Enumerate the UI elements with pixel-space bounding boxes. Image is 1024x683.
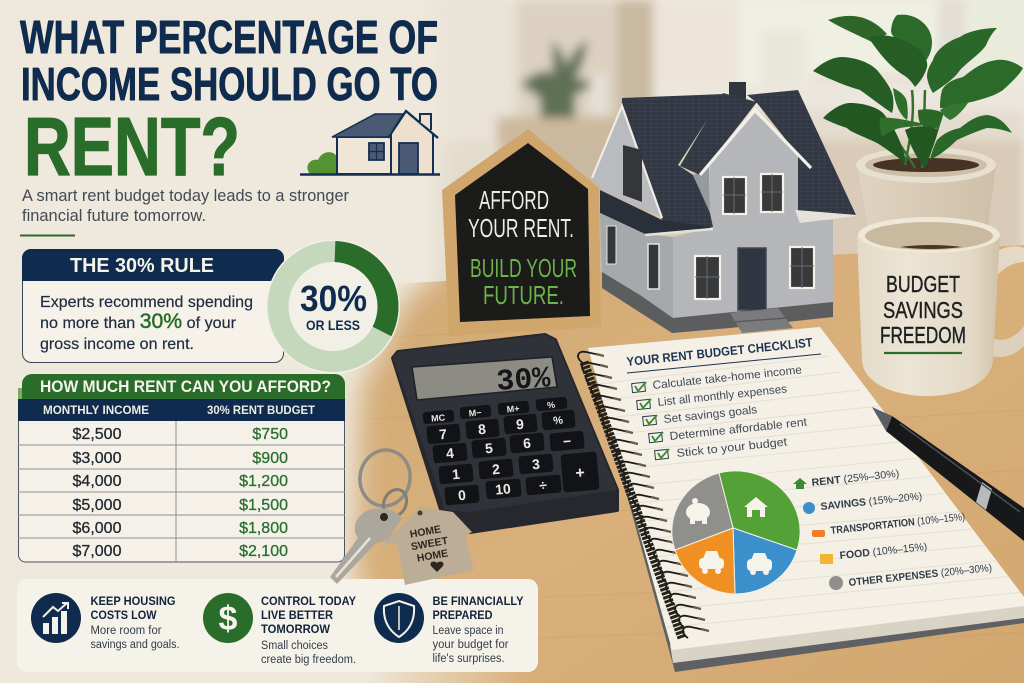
tag heart [431, 562, 443, 572]
pie legend [793, 468, 993, 590]
pie legend: TRANSPORTATION (10%–15%) [830, 511, 966, 537]
income values: $3,000 [73, 450, 122, 467]
tip 3 text: Leave space in [432, 625, 504, 637]
income values: $4,000 [73, 473, 122, 490]
subtitle: A smart rent budget today leads to a stronger [22, 187, 349, 205]
keypad: 4 [445, 445, 455, 461]
tip 2 text: Small choices [261, 640, 328, 652]
rent budget values [239, 426, 288, 560]
pie legend: RENT (25%–30%) [811, 468, 900, 489]
tip 3 text: BE FINANCIALLY [432, 594, 524, 608]
black board [455, 143, 590, 322]
tip 2 text: CONTROL TODAY [261, 594, 356, 608]
rule body text: Experts recommend spending [40, 294, 253, 311]
table column headers [18, 399, 345, 421]
donut chart: 30% or less: 30% [300, 278, 367, 319]
chalkboard sign: FUTURE. [483, 280, 564, 310]
donut chart: 30% or less [266, 240, 400, 374]
tip 2 text: create big freedom. [261, 654, 356, 666]
title: RENT? [24, 100, 240, 193]
white fascia [700, 110, 811, 175]
house keychain: SWEET [410, 535, 449, 553]
tip 1 text: More room for [90, 625, 162, 637]
keypad: M− [468, 407, 482, 419]
keypad: 8 [477, 421, 487, 437]
panel: the 30% rule: THE 30% RULE [70, 255, 214, 277]
income values [73, 426, 122, 560]
icon: shield [374, 593, 424, 643]
notebook back cover [588, 352, 1024, 672]
keypad: 10 [495, 480, 512, 498]
wood frame [442, 129, 601, 336]
keypad: 7 [438, 426, 448, 442]
pie chart [672, 471, 800, 594]
check boxes [632, 382, 669, 460]
checklist items: Set savings goals [663, 404, 758, 426]
spiral binding [578, 352, 709, 638]
green tab [18, 388, 26, 399]
rent budget values: $900 [252, 450, 288, 467]
plant leaves [813, 15, 1023, 168]
eave right [795, 210, 856, 223]
steps [730, 308, 793, 333]
cream fade over left of desk [0, 0, 440, 683]
calculator body [393, 335, 617, 532]
tip 1 text: KEEP HOUSING [90, 594, 176, 608]
rent budget values: $1,200 [239, 473, 288, 490]
rent budget values: $1,500 [239, 497, 288, 514]
gable wall [592, 107, 662, 217]
upper windows [723, 177, 746, 214]
icon: dollar sign: $ [219, 600, 238, 638]
table: how much rent can you afford: HOW MUCH RENT CAN YOU AFFORD? [40, 377, 331, 396]
table heading [22, 374, 345, 399]
chalkboard sign: AFFORD [479, 185, 549, 215]
checklist items: Calculate take-home income [652, 364, 802, 392]
cream fade along the bottom [330, 655, 535, 683]
side windows [607, 226, 616, 264]
lower windows [695, 256, 720, 299]
keypad: 0 [457, 487, 467, 503]
keypad: 2 [491, 461, 501, 477]
pie legend: OTHER EXPENSES (20%–30%) [848, 562, 993, 589]
screen [412, 357, 557, 400]
table: how much rent can you afford: 30% RENT BUDGET [207, 403, 316, 417]
keypad: M+ [506, 403, 520, 415]
model house [592, 82, 856, 333]
lower side wall [600, 213, 673, 318]
key ring [356, 446, 414, 510]
pen [872, 407, 1024, 541]
plant pot [856, 147, 996, 250]
tip 3 text: PREPARED [432, 608, 493, 622]
house keychain: HOME [409, 523, 442, 541]
dormer roof [680, 93, 757, 175]
tip 3 text: your budget for [432, 639, 509, 651]
dormer side [693, 166, 710, 213]
coffee mug: SAVINGS [883, 297, 963, 323]
front wall [673, 113, 833, 318]
income values: $7,000 [73, 543, 122, 560]
chalkboard sign: YOUR RENT. [468, 213, 574, 243]
keypad: 3 [531, 456, 541, 472]
spiral notebook [578, 327, 1024, 672]
checklist items: Determine affordable rent [669, 417, 808, 443]
tip 1 text: COSTS LOW [90, 608, 157, 622]
calculator: 30% [495, 362, 553, 400]
pie icon: orange car [699, 551, 724, 574]
pie legend: FOOD (10%–15%) [839, 541, 928, 562]
pie icon: house [744, 497, 768, 517]
rent budget values: $1,800 [239, 520, 288, 537]
checklist items: List all monthly expenses [657, 383, 788, 409]
house keychain [330, 446, 474, 585]
house tag [383, 507, 474, 585]
gable window [623, 145, 642, 202]
rule header [22, 249, 284, 281]
keypad [423, 397, 600, 505]
pie icon: piggy bank [686, 498, 710, 524]
keypad: + [575, 465, 586, 482]
page stack [670, 600, 1024, 663]
chalkboard sign [442, 129, 601, 336]
calculator [393, 335, 617, 532]
coffee mug: BUDGET [886, 271, 960, 297]
income values: $5,000 [73, 497, 122, 514]
tip 1 text: savings and goals. [90, 639, 180, 651]
chalkboard sign: BUILD YOUR [470, 253, 577, 283]
keypad: − [562, 433, 572, 449]
checklist items [652, 364, 808, 460]
house keychain: HOME [416, 547, 449, 565]
keypad: MC [431, 412, 446, 424]
icon: outlined house [300, 111, 440, 174]
coffee mug: FREEDOM [880, 322, 966, 348]
title: WHAT PERCENTAGE OF [20, 11, 438, 63]
tip 2 text: TOMORROW [261, 622, 331, 636]
rule body text [40, 294, 253, 353]
door [738, 248, 766, 310]
foundation [602, 272, 833, 333]
back roof right [747, 90, 856, 215]
icon: dollar sign [203, 593, 253, 643]
tip 3 text [432, 594, 524, 665]
income values: $6,000 [73, 520, 122, 537]
keypad: 1 [451, 466, 461, 482]
key [330, 508, 402, 584]
lower eave strip [645, 229, 713, 235]
keypad: 9 [515, 416, 525, 432]
panel: the 30% rule [22, 249, 284, 362]
keypad: ÷ [538, 477, 548, 493]
table: how much rent can you afford: MONTHLY INCOME [43, 403, 149, 417]
tip 1 text [90, 594, 180, 651]
back roof left [622, 94, 724, 227]
coffee mug [857, 217, 1024, 396]
keypad: 6 [522, 435, 532, 451]
rent budget values: $750 [252, 426, 288, 443]
lower roof [600, 190, 713, 234]
tip 2 text [261, 594, 356, 666]
tip 2 text: LIVE BETTER [261, 608, 333, 622]
mug body [857, 236, 1000, 396]
table: how much rent can you afford [18, 374, 345, 562]
title: INCOME SHOULD GO TO [21, 58, 438, 110]
table body [18, 410, 344, 562]
tip 3 text: life's surprises. [432, 653, 504, 665]
panel: tips [17, 579, 538, 672]
pie legend: SAVINGS (15%–20%) [820, 490, 923, 513]
gable trim [592, 106, 662, 218]
checklist items: Stick to your budget [676, 436, 789, 460]
keypad: 5 [484, 440, 494, 456]
donut chart: 30% or less: OR LESS [306, 317, 360, 333]
rent budget values: $2,100 [239, 543, 288, 560]
pie icon: blue car [747, 553, 772, 575]
keypad: % [547, 400, 556, 410]
icon: growth chart [31, 593, 81, 643]
rule body text: gross income on rent. [40, 336, 194, 353]
keypad: % [553, 415, 564, 427]
checklist heading: YOUR RENT BUDGET CHECKLIST [626, 335, 814, 369]
mug handle [996, 246, 1024, 276]
chimney [729, 82, 746, 99]
notebook page [588, 327, 1024, 650]
income values: $2,500 [73, 426, 122, 443]
rule body text: no more than 30% of your [40, 310, 237, 333]
subtitle [22, 187, 349, 225]
wooden desk [340, 245, 1024, 683]
subtitle: financial future tomorrow. [22, 207, 206, 225]
title [20, 11, 438, 193]
